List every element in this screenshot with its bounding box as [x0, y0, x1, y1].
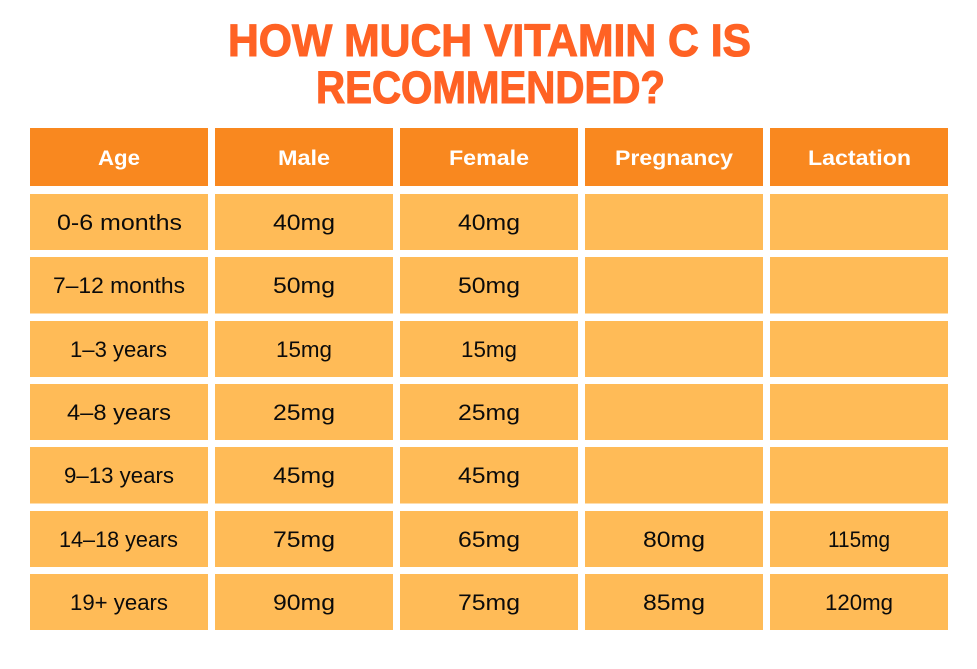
title: HOW MUCH VITAMIN C IS: [228, 15, 751, 66]
row: 4–8 years: 25mg: [458, 400, 520, 425]
row: 0-6 months: 40mg: [458, 210, 520, 235]
header row: Male: [278, 147, 330, 170]
row: 9–13 years: 45mg: [273, 463, 335, 488]
row: 19+ years: 120mg: [825, 590, 893, 615]
row: 14–18 years: 115mg: [828, 527, 890, 552]
row: 14–18 years: 80mg: [643, 527, 705, 552]
row: 7–12 months: [30, 257, 948, 314]
row: 1–3 years: [30, 321, 948, 377]
header row: Female: [449, 147, 529, 170]
row: 9–13 years: [30, 447, 948, 504]
row: 0-6 months: [30, 194, 948, 250]
row: 19+ years: [30, 574, 948, 630]
row: 4–8 years: 4–8 years: [67, 400, 171, 425]
row: 4–8 years: [30, 384, 948, 440]
row: 19+ years: 75mg: [458, 590, 520, 615]
row: 9–13 years: 9–13 years: [64, 463, 174, 488]
row: 19+ years: 19+ years: [70, 590, 168, 615]
row: 14–18 years: 75mg: [273, 527, 335, 552]
row: 14–18 years: 14–18 years: [59, 527, 178, 552]
row: 1–3 years: 1–3 years: [70, 337, 167, 362]
header row: Pregnancy: [615, 147, 733, 170]
row: 14–18 years: [30, 511, 948, 567]
row: 19+ years: 85mg: [643, 590, 705, 615]
row: 4–8 years: 25mg: [273, 400, 335, 425]
row: 1–3 years: 15mg: [276, 337, 332, 362]
row: 0-6 months: 0-6 months: [57, 210, 182, 235]
header row: Lactation: [808, 147, 911, 170]
row: 9–13 years: 45mg: [458, 463, 520, 488]
title: RECOMMENDED?: [316, 62, 665, 113]
table: vitamin C recommendations: [30, 128, 948, 630]
title: [228, 15, 751, 113]
row: 7–12 months: 50mg: [458, 273, 520, 298]
header row: Age: [98, 147, 140, 170]
header row: [30, 128, 948, 186]
row: 7–12 months: 50mg: [273, 273, 335, 298]
row: 0-6 months: 40mg: [273, 210, 335, 235]
row: 1–3 years: 15mg: [461, 337, 517, 362]
row: 14–18 years: 65mg: [458, 527, 520, 552]
row: 7–12 months: 7–12 months: [53, 273, 185, 298]
row: 19+ years: 90mg: [273, 590, 335, 615]
